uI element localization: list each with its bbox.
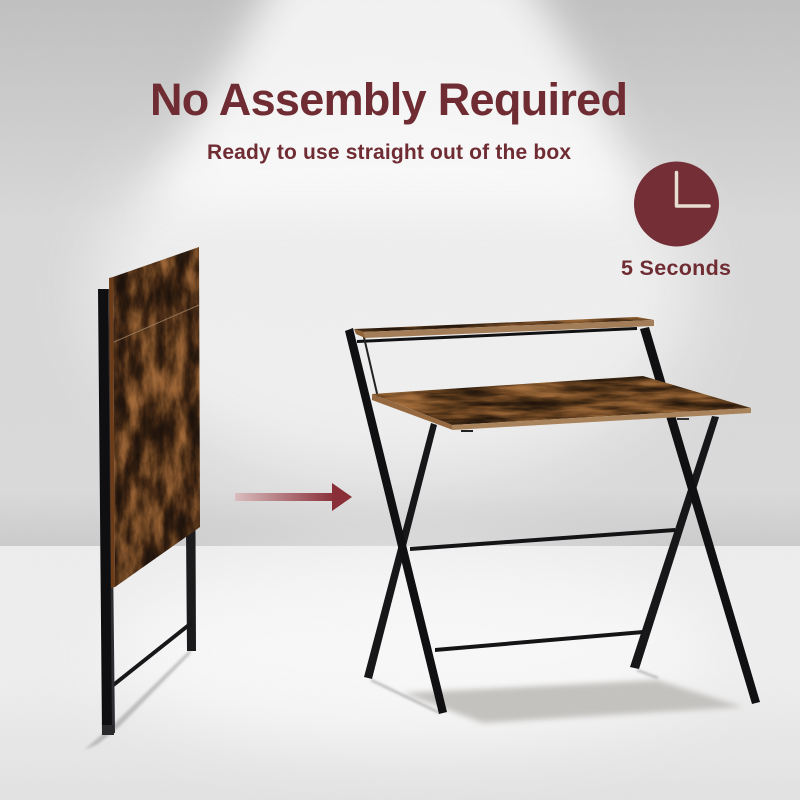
back legs bbox=[364, 416, 719, 679]
shelf strut bbox=[363, 333, 379, 402]
folded desk board edge bbox=[109, 277, 115, 588]
icon: clock bbox=[634, 162, 719, 246]
folded desk shadow bbox=[84, 648, 192, 750]
folded desk bbox=[84, 247, 200, 750]
folded desk crossbar bbox=[114, 620, 192, 687]
folded desk right leg bbox=[186, 530, 196, 651]
unfolded desk bbox=[345, 317, 760, 723]
folded desk board groove bbox=[114, 305, 199, 342]
upper shelf bbox=[354, 317, 654, 338]
folded desk frame bbox=[98, 289, 115, 735]
main desktop bbox=[372, 376, 751, 432]
title: No Assembly Required bbox=[150, 74, 628, 125]
shelf rail bbox=[357, 327, 637, 343]
front legs bbox=[345, 327, 760, 714]
floor shadow bbox=[371, 670, 743, 723]
folded desk board top bbox=[113, 247, 200, 587]
arrow: folded to unfolded bbox=[235, 483, 352, 511]
subtitle: Ready to use straight out of the box bbox=[207, 141, 571, 164]
lower crossbars bbox=[410, 528, 675, 652]
label: 5 Seconds: 5 Seconds bbox=[621, 256, 731, 280]
